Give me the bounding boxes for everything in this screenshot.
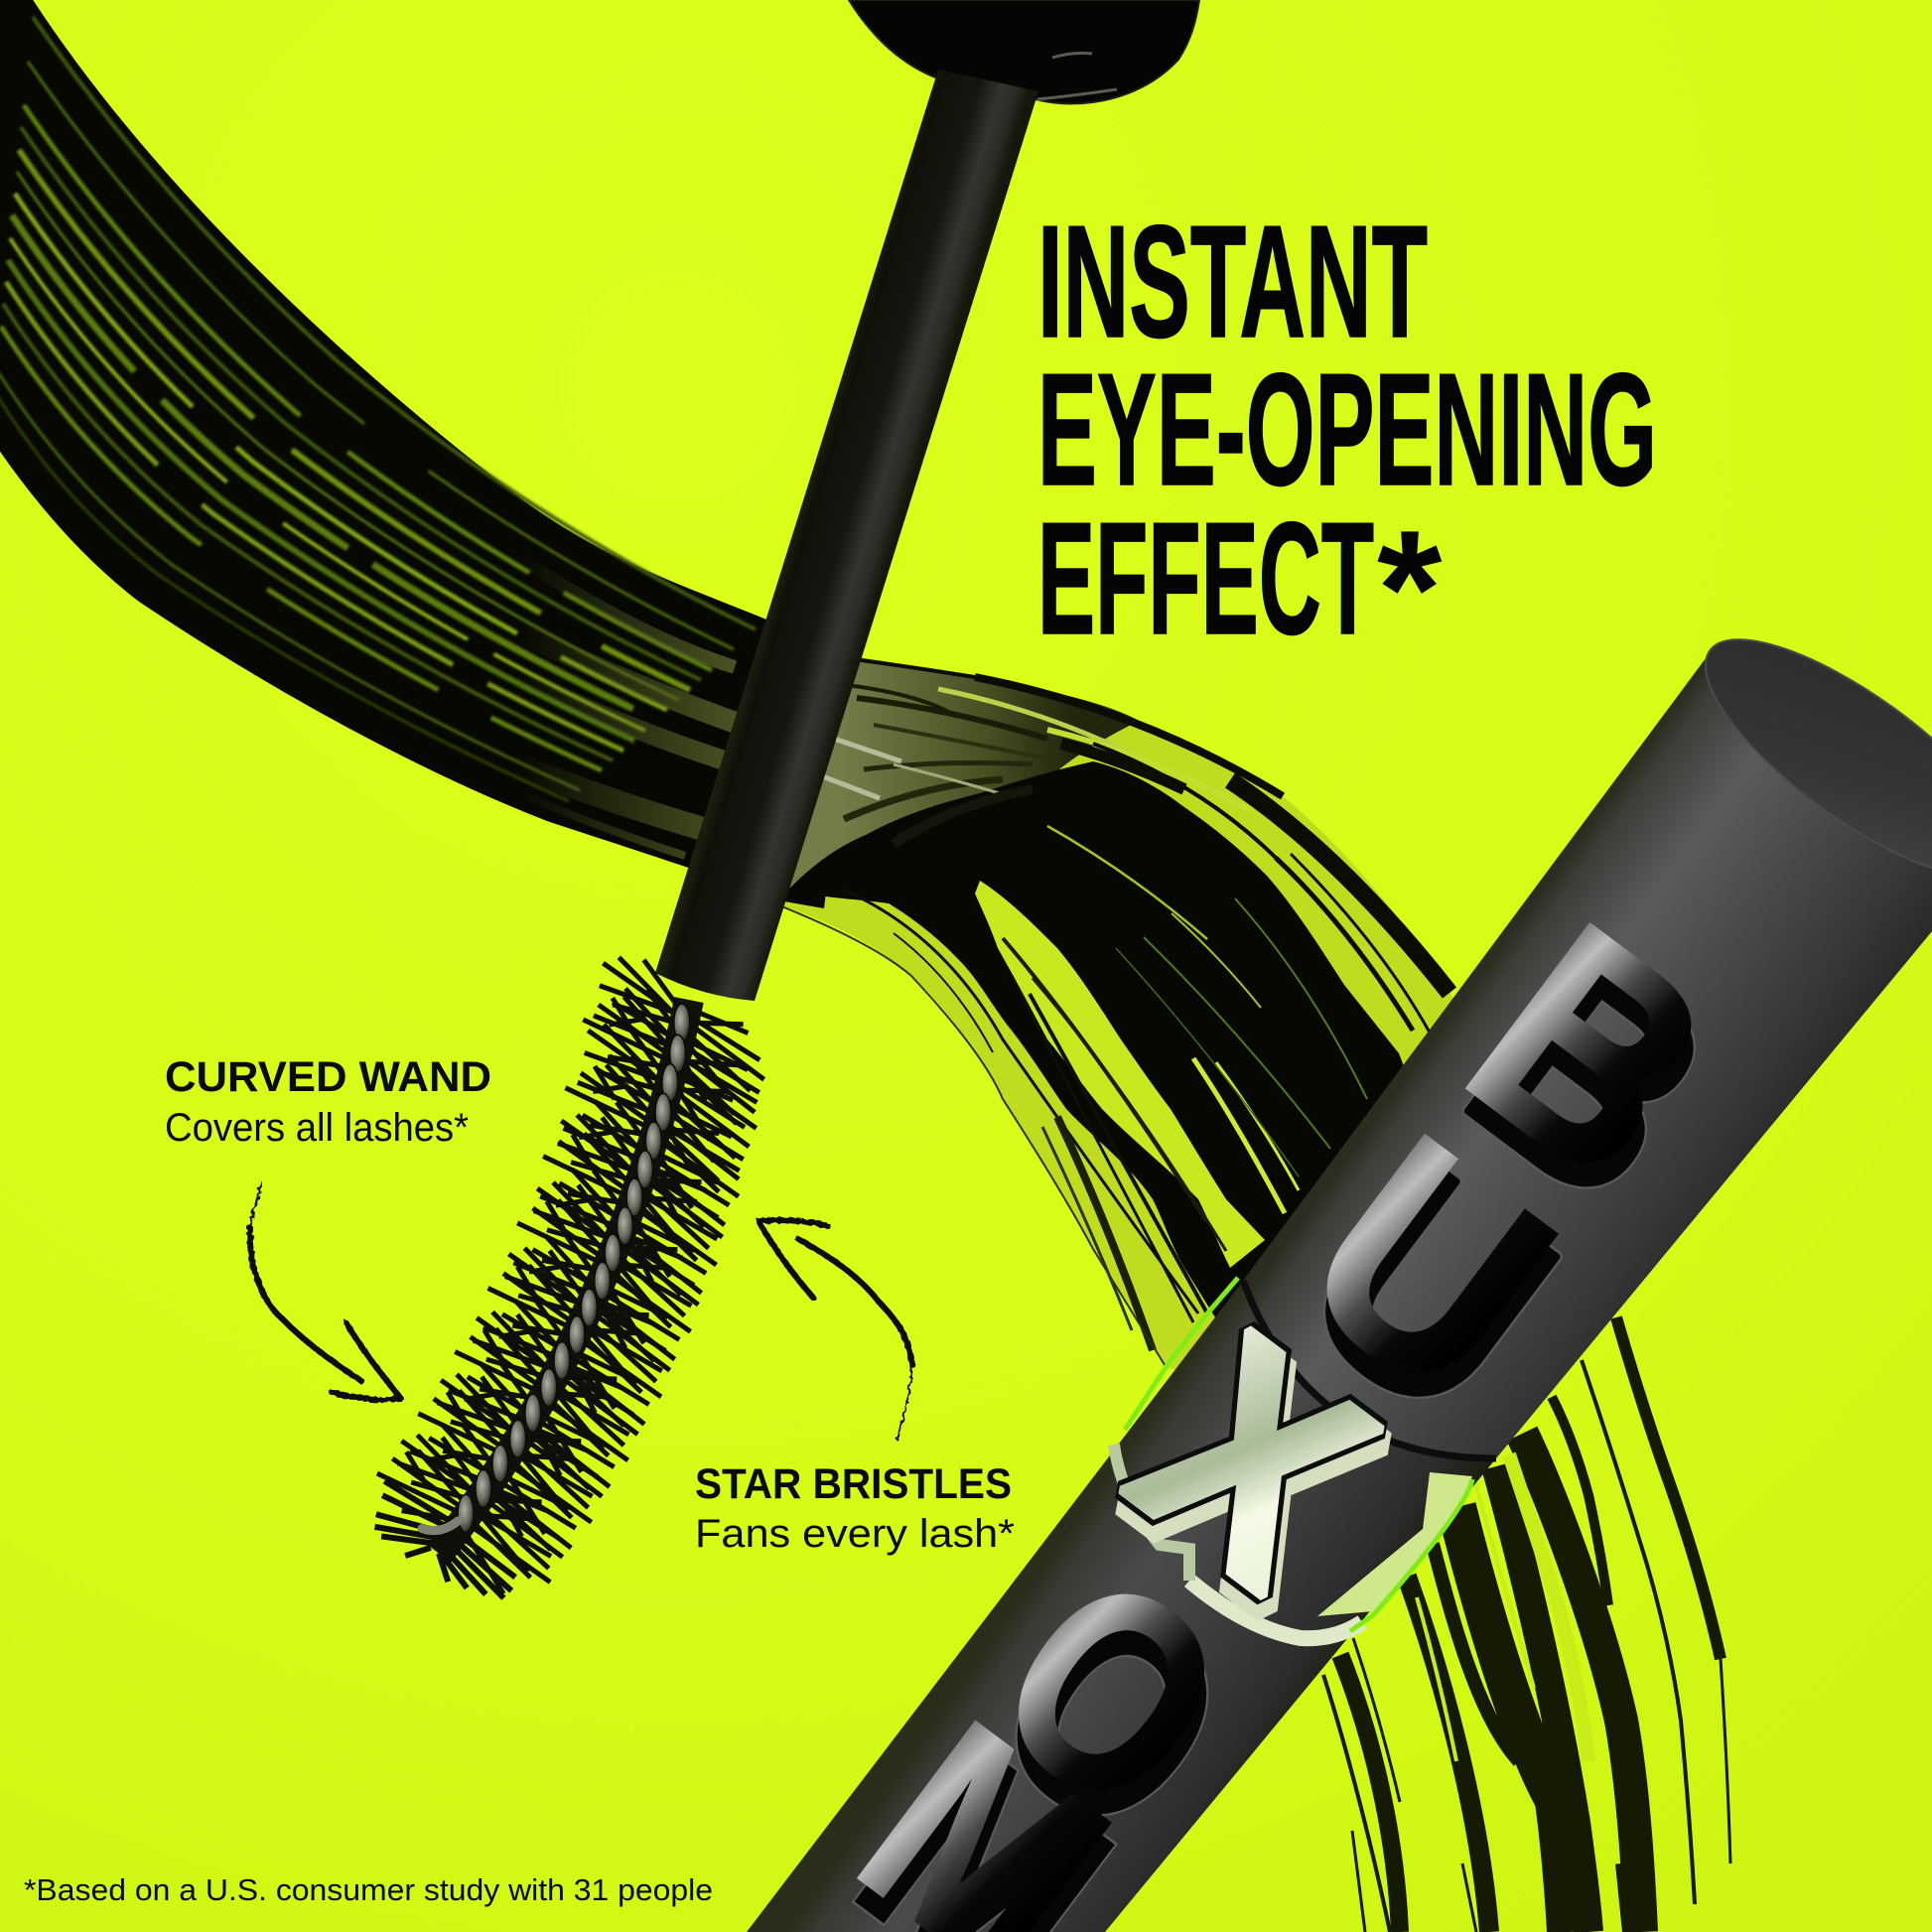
- headline: INSTANT: [1037, 193, 1428, 371]
- wand cap: [849, 0, 1199, 103]
- swatch: light streaks in olive zone: [820, 685, 1253, 844]
- tube: upper cap: [1243, 650, 1932, 1458]
- swatch: translucent ground of the curve: [774, 655, 1489, 1390]
- brush: core shadow: [439, 1000, 722, 1569]
- tube: seam: [1243, 1281, 1496, 1458]
- swatch: lime slits in tail: [1417, 1454, 1588, 1761]
- logo letter B: B: [1415, 862, 1766, 1242]
- logo letter B: B: [1416, 885, 1767, 1265]
- footnote: *Based on a U.S. consumer study with 31 people: [24, 1872, 713, 1907]
- swatch: olive fade before the wand: [437, 556, 794, 856]
- headline: *: [1377, 495, 1443, 682]
- callout: curved wand: Covers all lashes*: [165, 1106, 469, 1150]
- brush: twisted wire: [422, 992, 735, 1561]
- tube: light strip left: [1114, 1445, 1189, 1581]
- arrow: to curved wand: [250, 1183, 401, 1400]
- logo letter O: O: [945, 1535, 1279, 1896]
- logo letter U: U: [1251, 1097, 1608, 1482]
- callout: curved wand: CURVED WAND: [165, 1053, 491, 1101]
- swatch: separated tail bands: [1323, 1317, 1730, 1932]
- tube: lower body: [747, 1281, 1496, 1932]
- logo letter X: X: [1080, 1274, 1428, 1650]
- logo lettering on tube: [791, 850, 1781, 1932]
- spiral brush: [345, 945, 822, 1630]
- tube: green edges: [1125, 1278, 1472, 1631]
- swatch: fine streaks in curve: [774, 826, 1367, 1368]
- swatch: outer dark bands: [854, 659, 1449, 1033]
- swatch: main solid body: [0, 0, 854, 908]
- swatch: lime slit in core: [975, 881, 1265, 1268]
- arrow: to star bristles: [759, 1220, 912, 1440]
- logo letter X: X: [1080, 1274, 1428, 1650]
- callout: star bristles: [695, 1460, 1015, 1556]
- swatch: green strands upper left: [0, 17, 756, 801]
- logo letter U: U: [1250, 1074, 1608, 1459]
- headline: EFFECT: [1037, 489, 1374, 668]
- logo letter B: B: [1416, 885, 1767, 1265]
- swatch: translucent olive section: [788, 659, 1139, 890]
- tube: glass collar right: [1317, 1472, 1472, 1616]
- callout: star bristles: Fans every lash*: [695, 1512, 1015, 1556]
- headline: [1037, 193, 1657, 682]
- logo letter O: O: [945, 1535, 1279, 1896]
- tube: top end: [1674, 601, 1932, 916]
- brush: bristles: [345, 945, 822, 1630]
- callout: curved wand: [165, 1053, 491, 1150]
- tube: light strip lower: [1189, 1581, 1362, 1638]
- logo letter O: O: [944, 1512, 1279, 1873]
- mascara tube: [747, 601, 1932, 1932]
- logo letter X: X: [1082, 1288, 1430, 1664]
- callout: star bristles: STAR BRISTLES: [695, 1460, 1012, 1508]
- logo letter U: U: [1251, 1097, 1608, 1482]
- wand stem: [655, 69, 1038, 1001]
- swatch: central dark core: [788, 761, 1489, 1340]
